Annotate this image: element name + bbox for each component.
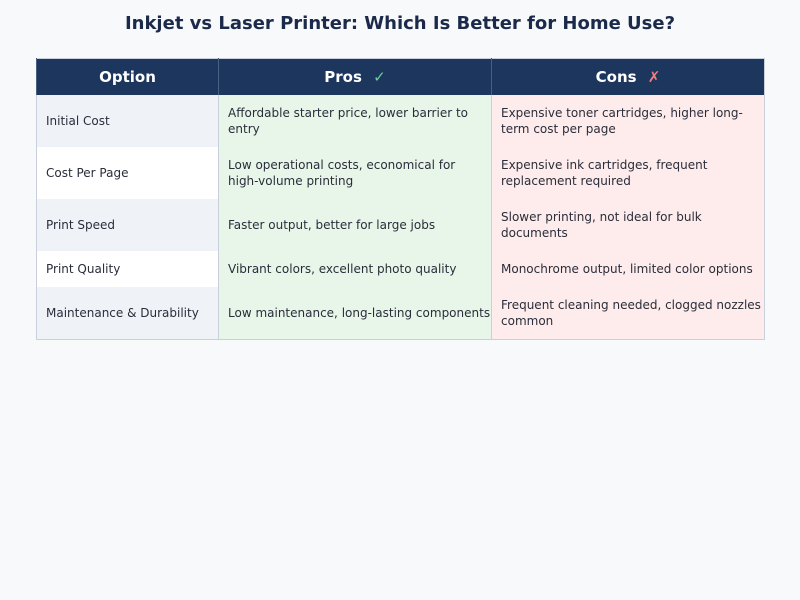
comparison table: Low maintenance, long-lasting components (228, 306, 490, 320)
comparison table: Affordable starter price, lower barrier to (228, 106, 468, 120)
comparison table: Option (99, 68, 156, 86)
comparison table: Initial Cost (46, 114, 110, 128)
comparison table: Low operational costs, economical for (228, 158, 455, 172)
title: Inkjet vs Laser Printer: Which Is Better for Home Use? (125, 13, 675, 34)
comparison table (36, 58, 765, 340)
comparison table: Frequent cleaning needed, clogged nozzles (501, 298, 761, 312)
comparison table: Monochrome output, limited color options (501, 262, 753, 276)
comparison table: Print Speed (46, 218, 115, 232)
comparison table: entry (228, 122, 260, 136)
comparison table: Pros ✓ (324, 68, 386, 86)
comparison table: Cost Per Page (46, 166, 128, 180)
comparison table: Expensive ink cartridges, frequent (501, 158, 707, 172)
comparison table: term cost per page (501, 122, 616, 136)
comparison table: Faster output, better for large jobs (228, 218, 435, 232)
comparison table: Vibrant colors, excellent photo quality (228, 262, 456, 276)
comparison table: Print Quality (46, 262, 120, 276)
comparison table: common (501, 314, 553, 328)
comparison table: documents (501, 226, 568, 240)
comparison table: Cons ✗ (596, 68, 660, 86)
comparison table: Maintenance & Durability (46, 306, 199, 320)
comparison table: high-volume printing (228, 174, 353, 188)
comparison table: Slower printing, not ideal for bulk (501, 210, 702, 224)
comparison table: replacement required (501, 174, 631, 188)
comparison table: Expensive toner cartridges, higher long- (501, 106, 743, 120)
